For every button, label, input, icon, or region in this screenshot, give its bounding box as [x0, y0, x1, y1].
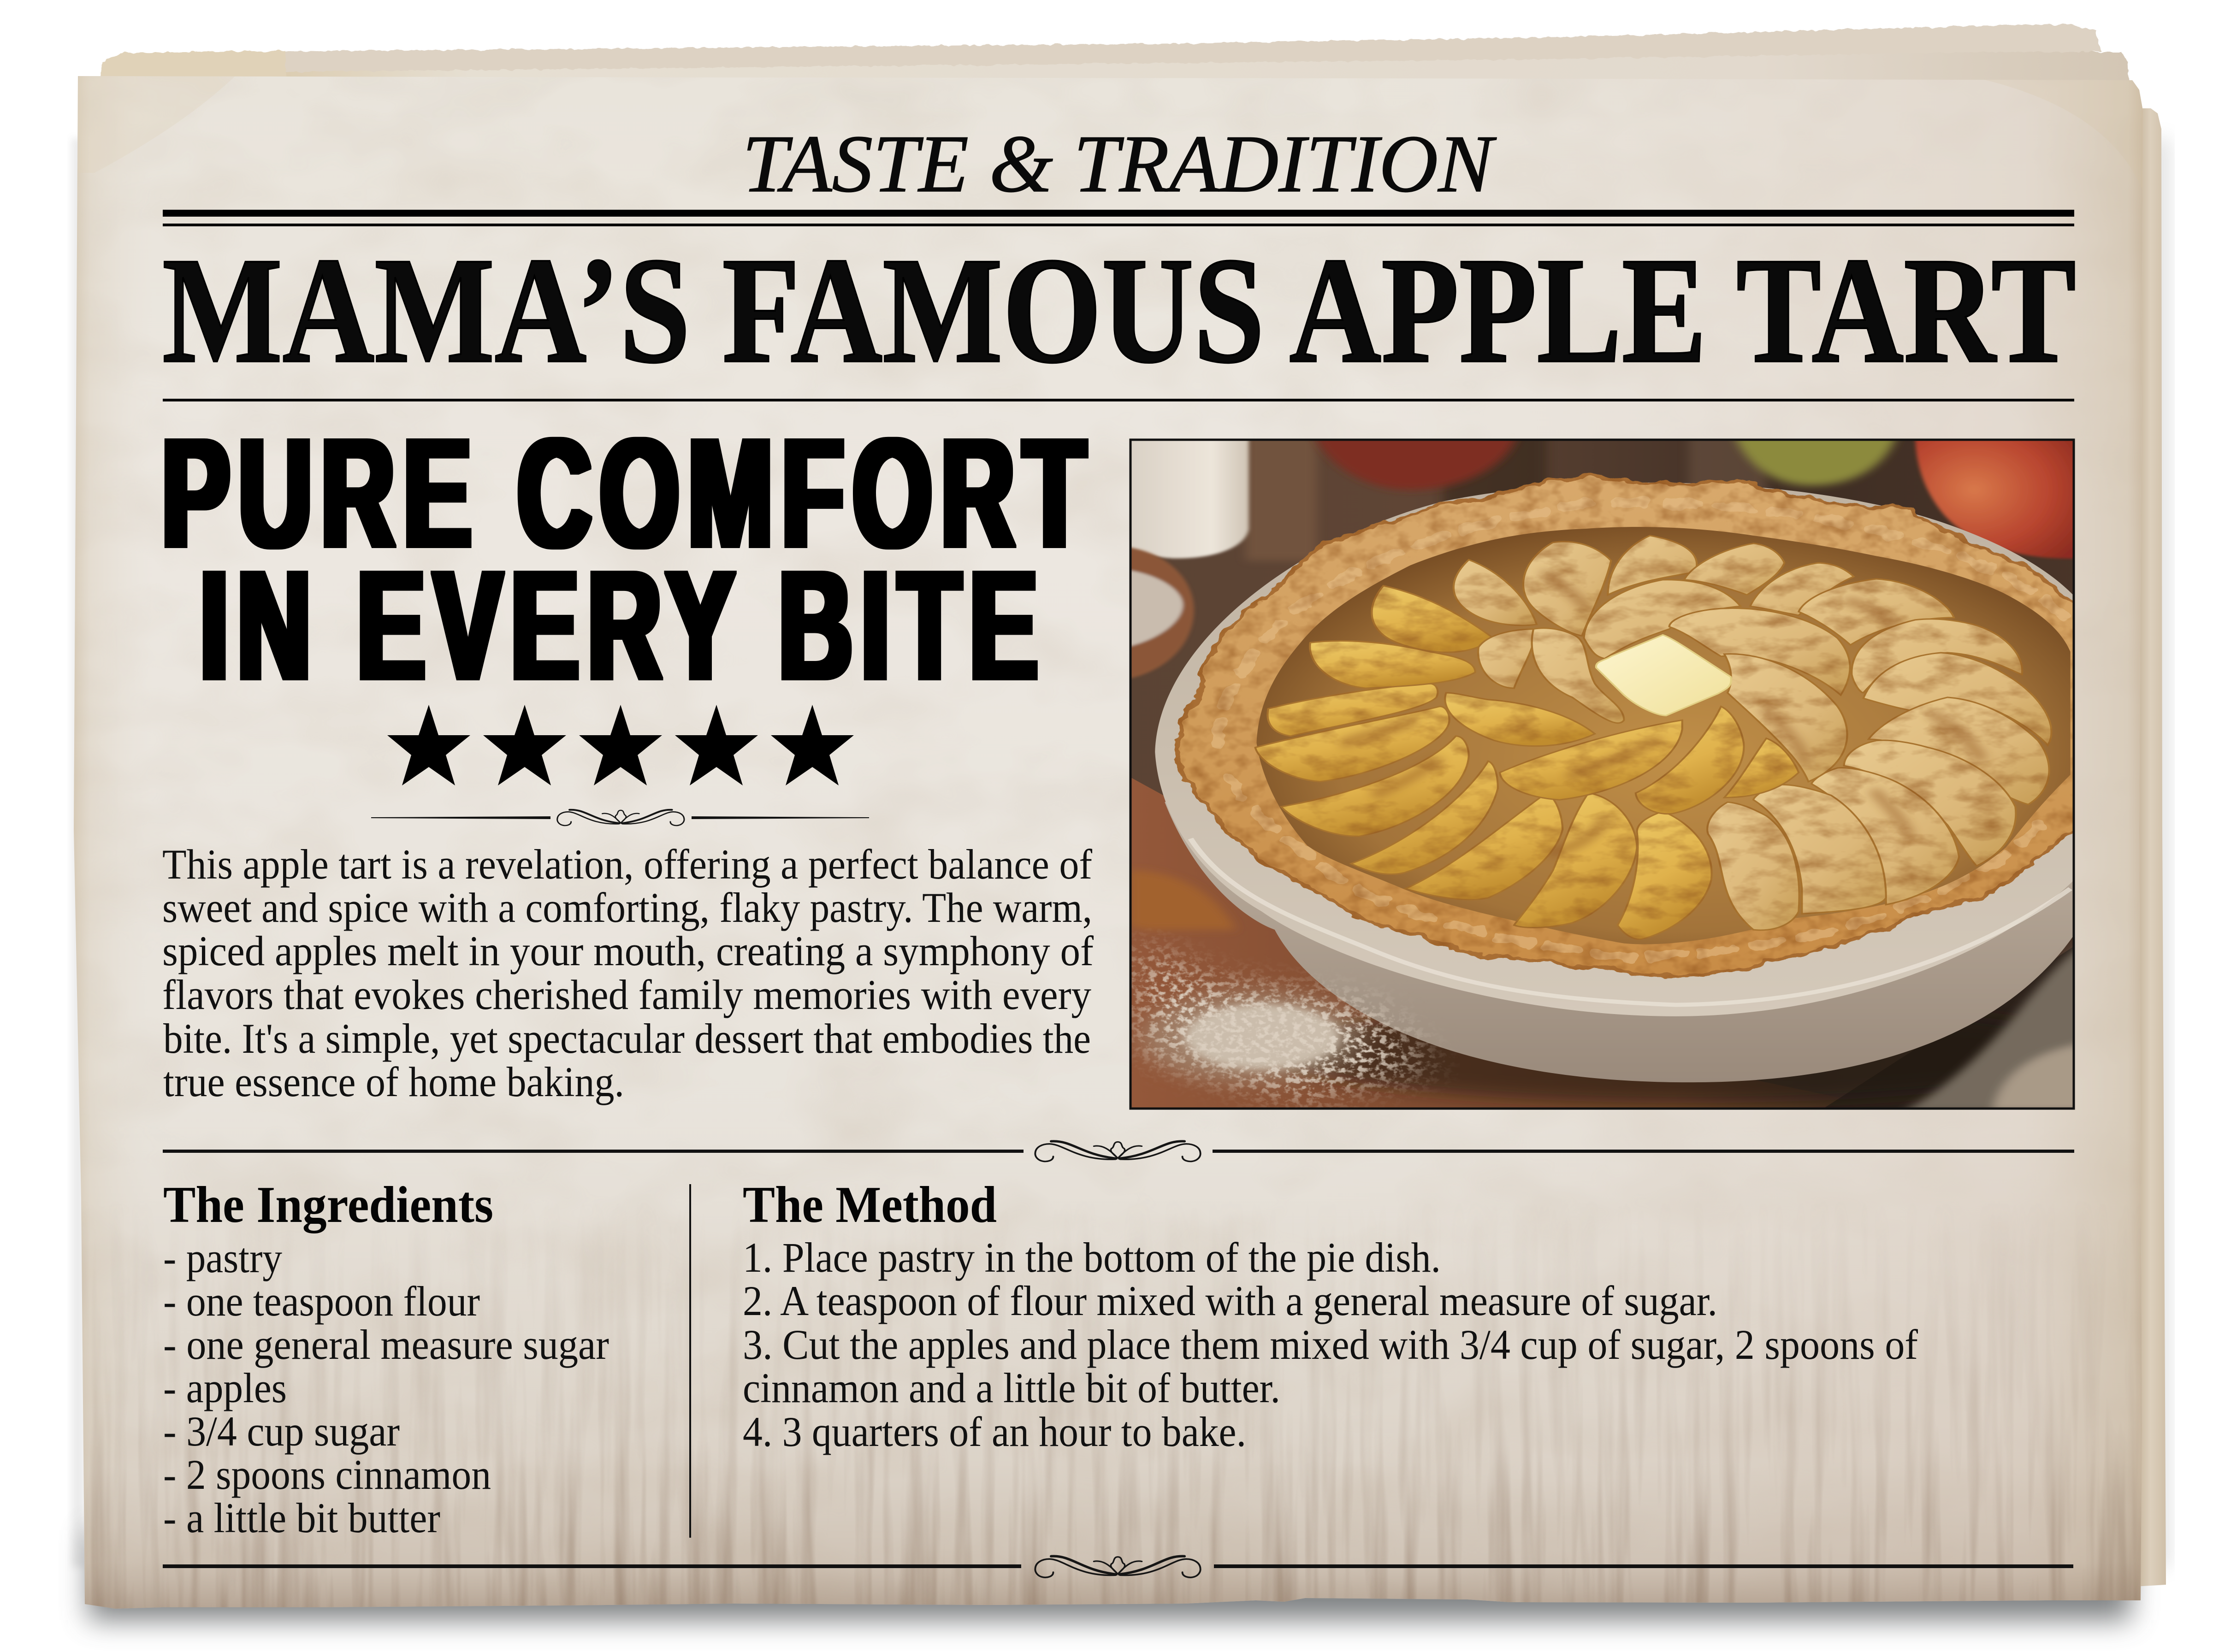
headline: [162, 407, 1095, 712]
body paragraph: true essence of home baking.: [163, 1058, 624, 1105]
flour pile: [1132, 944, 1430, 1098]
ingredients list: [163, 1234, 609, 1541]
ingredients list: - 3/4 cup sugar: [163, 1408, 400, 1455]
apple slices: [1255, 536, 2052, 939]
back apples: [1314, 433, 1897, 490]
method steps: cinnamon and a little bit of butter.: [743, 1364, 1280, 1411]
body paragraph: This apple tart is a revelation, offering a perfect balance of: [162, 841, 1092, 888]
method steps: 2. A teaspoon of flour mixed with a general measure of sugar.: [743, 1277, 1717, 1324]
double rule under section label: [163, 210, 2074, 226]
photo: apple tart in pie dish: [1130, 439, 2075, 1110]
back sheets: top folded layers: [99, 24, 2129, 92]
method steps: [743, 1234, 1918, 1455]
ingredients list: - 2 spoons cinnamon: [163, 1451, 491, 1498]
body paragraph: flavors that evokes cherished family memories with every: [162, 971, 1091, 1018]
panel: method: [743, 1176, 1918, 1455]
headline: IN EVERY BITE: [200, 539, 1047, 712]
method heading: The Method: [743, 1176, 997, 1233]
headline: PURE COMFORT: [162, 407, 1095, 580]
right apple: [1915, 433, 2083, 559]
ingredients list: - one general measure sugar: [163, 1321, 609, 1368]
pie dish rim: [1155, 483, 2083, 1016]
method steps: 4. 3 quarters of an hour to bake.: [743, 1408, 1246, 1455]
body paragraph: [162, 841, 1094, 1105]
method steps: 3. Cut the apples and place them mixed with 3/4 cup of sugar, 2 spoons of: [743, 1321, 1918, 1368]
ingredients list: - one teaspoon flour: [163, 1278, 480, 1325]
pie dish body: [1165, 552, 2121, 1082]
ingredients list: - apples: [163, 1364, 287, 1411]
filling: [1257, 527, 2071, 944]
body paragraph: bite. It's a simple, yet spectacular dessert that embodies the: [163, 1015, 1091, 1062]
panel: ingredients: [163, 1176, 609, 1541]
back sheet: right edge strip: [2135, 108, 2166, 1587]
linen napkin: [1902, 944, 2083, 1112]
method steps: 1. Place pastry in the bottom of the pie dish.: [743, 1234, 1441, 1281]
butter pat: [1596, 635, 1731, 715]
jar: [1126, 435, 1249, 558]
wooden table: [1106, 415, 2121, 1129]
ingredients heading: The Ingredients: [163, 1176, 493, 1233]
pastry crust: [1177, 476, 2083, 976]
photo frame: [1130, 440, 2074, 1109]
body paragraph: spiced apples melt in your mouth, creating a symphony of: [162, 927, 1094, 974]
shadow under dish: [1275, 1003, 2103, 1103]
ingredients list: - a little bit butter: [163, 1494, 440, 1541]
small divider with flourish: [371, 810, 869, 826]
section divider with flourish: [163, 1141, 2074, 1162]
bottom divider with flourish: [163, 1556, 2073, 1577]
body paragraph: sweet and spice with a comforting, flaky pastry. The warm,: [162, 884, 1092, 931]
cinnamon streaks on slices: [1346, 574, 1980, 852]
ingredients list: - pastry: [163, 1234, 282, 1281]
rule under title: [163, 399, 2074, 401]
bowl of flour: [1126, 547, 1194, 678]
five star rating: [387, 705, 854, 785]
section label: Taste & Tradition: TASTE & TRADITION: [742, 118, 1497, 209]
column divider: [689, 1184, 691, 1538]
